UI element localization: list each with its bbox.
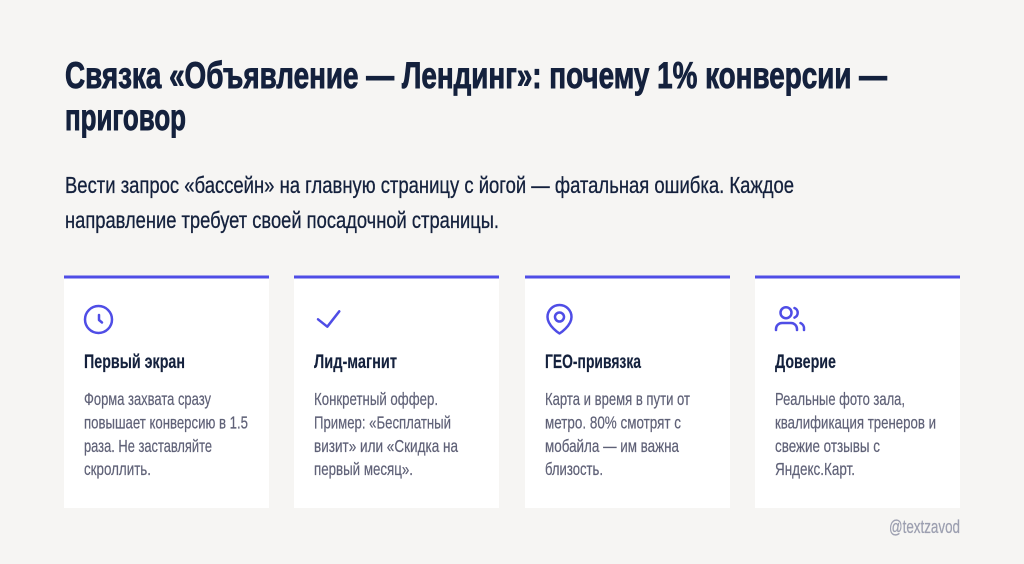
- text: лид-магнит: Пример: «Бесплатный: [314, 412, 451, 432]
- icon: check mark: [318, 311, 339, 327]
- text: доверие: [775, 389, 936, 479]
- title: приговор: [65, 97, 186, 138]
- icon: users: [776, 307, 804, 330]
- text: гео-привязка: метро. 80% смотрят с: [545, 412, 681, 432]
- subtitle text block: [65, 172, 794, 233]
- text: лид-магнит: Конкретный оффер.: [314, 389, 438, 409]
- text: гео-привязка: близость.: [545, 459, 603, 479]
- text: лид-магнит: первый месяц».: [314, 459, 413, 479]
- heading: доверие: Доверие: [775, 351, 836, 373]
- text: гео-привязка: мобайла — им важна: [545, 436, 679, 456]
- title: [65, 55, 887, 138]
- icon: clock: [85, 306, 112, 333]
- text: первый экран: Форма захвата сразу: [84, 389, 211, 409]
- text: первый экран: [84, 389, 248, 479]
- heading: лид-магнит: Лид-магнит: [314, 351, 397, 373]
- panel: доверие: [755, 276, 960, 508]
- subtitle text block: направление требует своей посадочной страницы.: [65, 207, 499, 233]
- heading: гео-привязка: ГЕО-привязка: [545, 351, 641, 373]
- icon: map pin: [548, 305, 572, 334]
- watermark: @textzavod: [889, 517, 960, 537]
- subtitle text block: Вести запрос «бассейн» на главную страницу с йогой — фатальная ошибка. Каждое: [65, 172, 794, 198]
- text: доверие: Яндекс.Карт.: [775, 459, 855, 479]
- heading: первый экран: Первый экран: [84, 351, 185, 373]
- text: лид-магнит: визит» или «Скидка на: [314, 436, 458, 456]
- text: первый экран: раза. Не заставляйте: [84, 436, 212, 456]
- panel: лид-магнит: [294, 276, 499, 508]
- text: первый экран: повышает конверсию в 1.5: [84, 412, 248, 432]
- panel: первый экран: [64, 276, 269, 508]
- text: первый экран: скроллить.: [84, 459, 151, 479]
- text: гео-привязка: Карта и время в пути от: [545, 389, 690, 409]
- text: лид-магнит: [314, 389, 458, 479]
- panel: гео-привязка: [525, 276, 730, 508]
- text: гео-привязка: [545, 389, 690, 479]
- text: доверие: Реальные фото зала,: [775, 389, 905, 409]
- text: доверие: квалификация тренеров и: [775, 412, 936, 432]
- text: доверие: свежие отзывы с: [775, 436, 880, 456]
